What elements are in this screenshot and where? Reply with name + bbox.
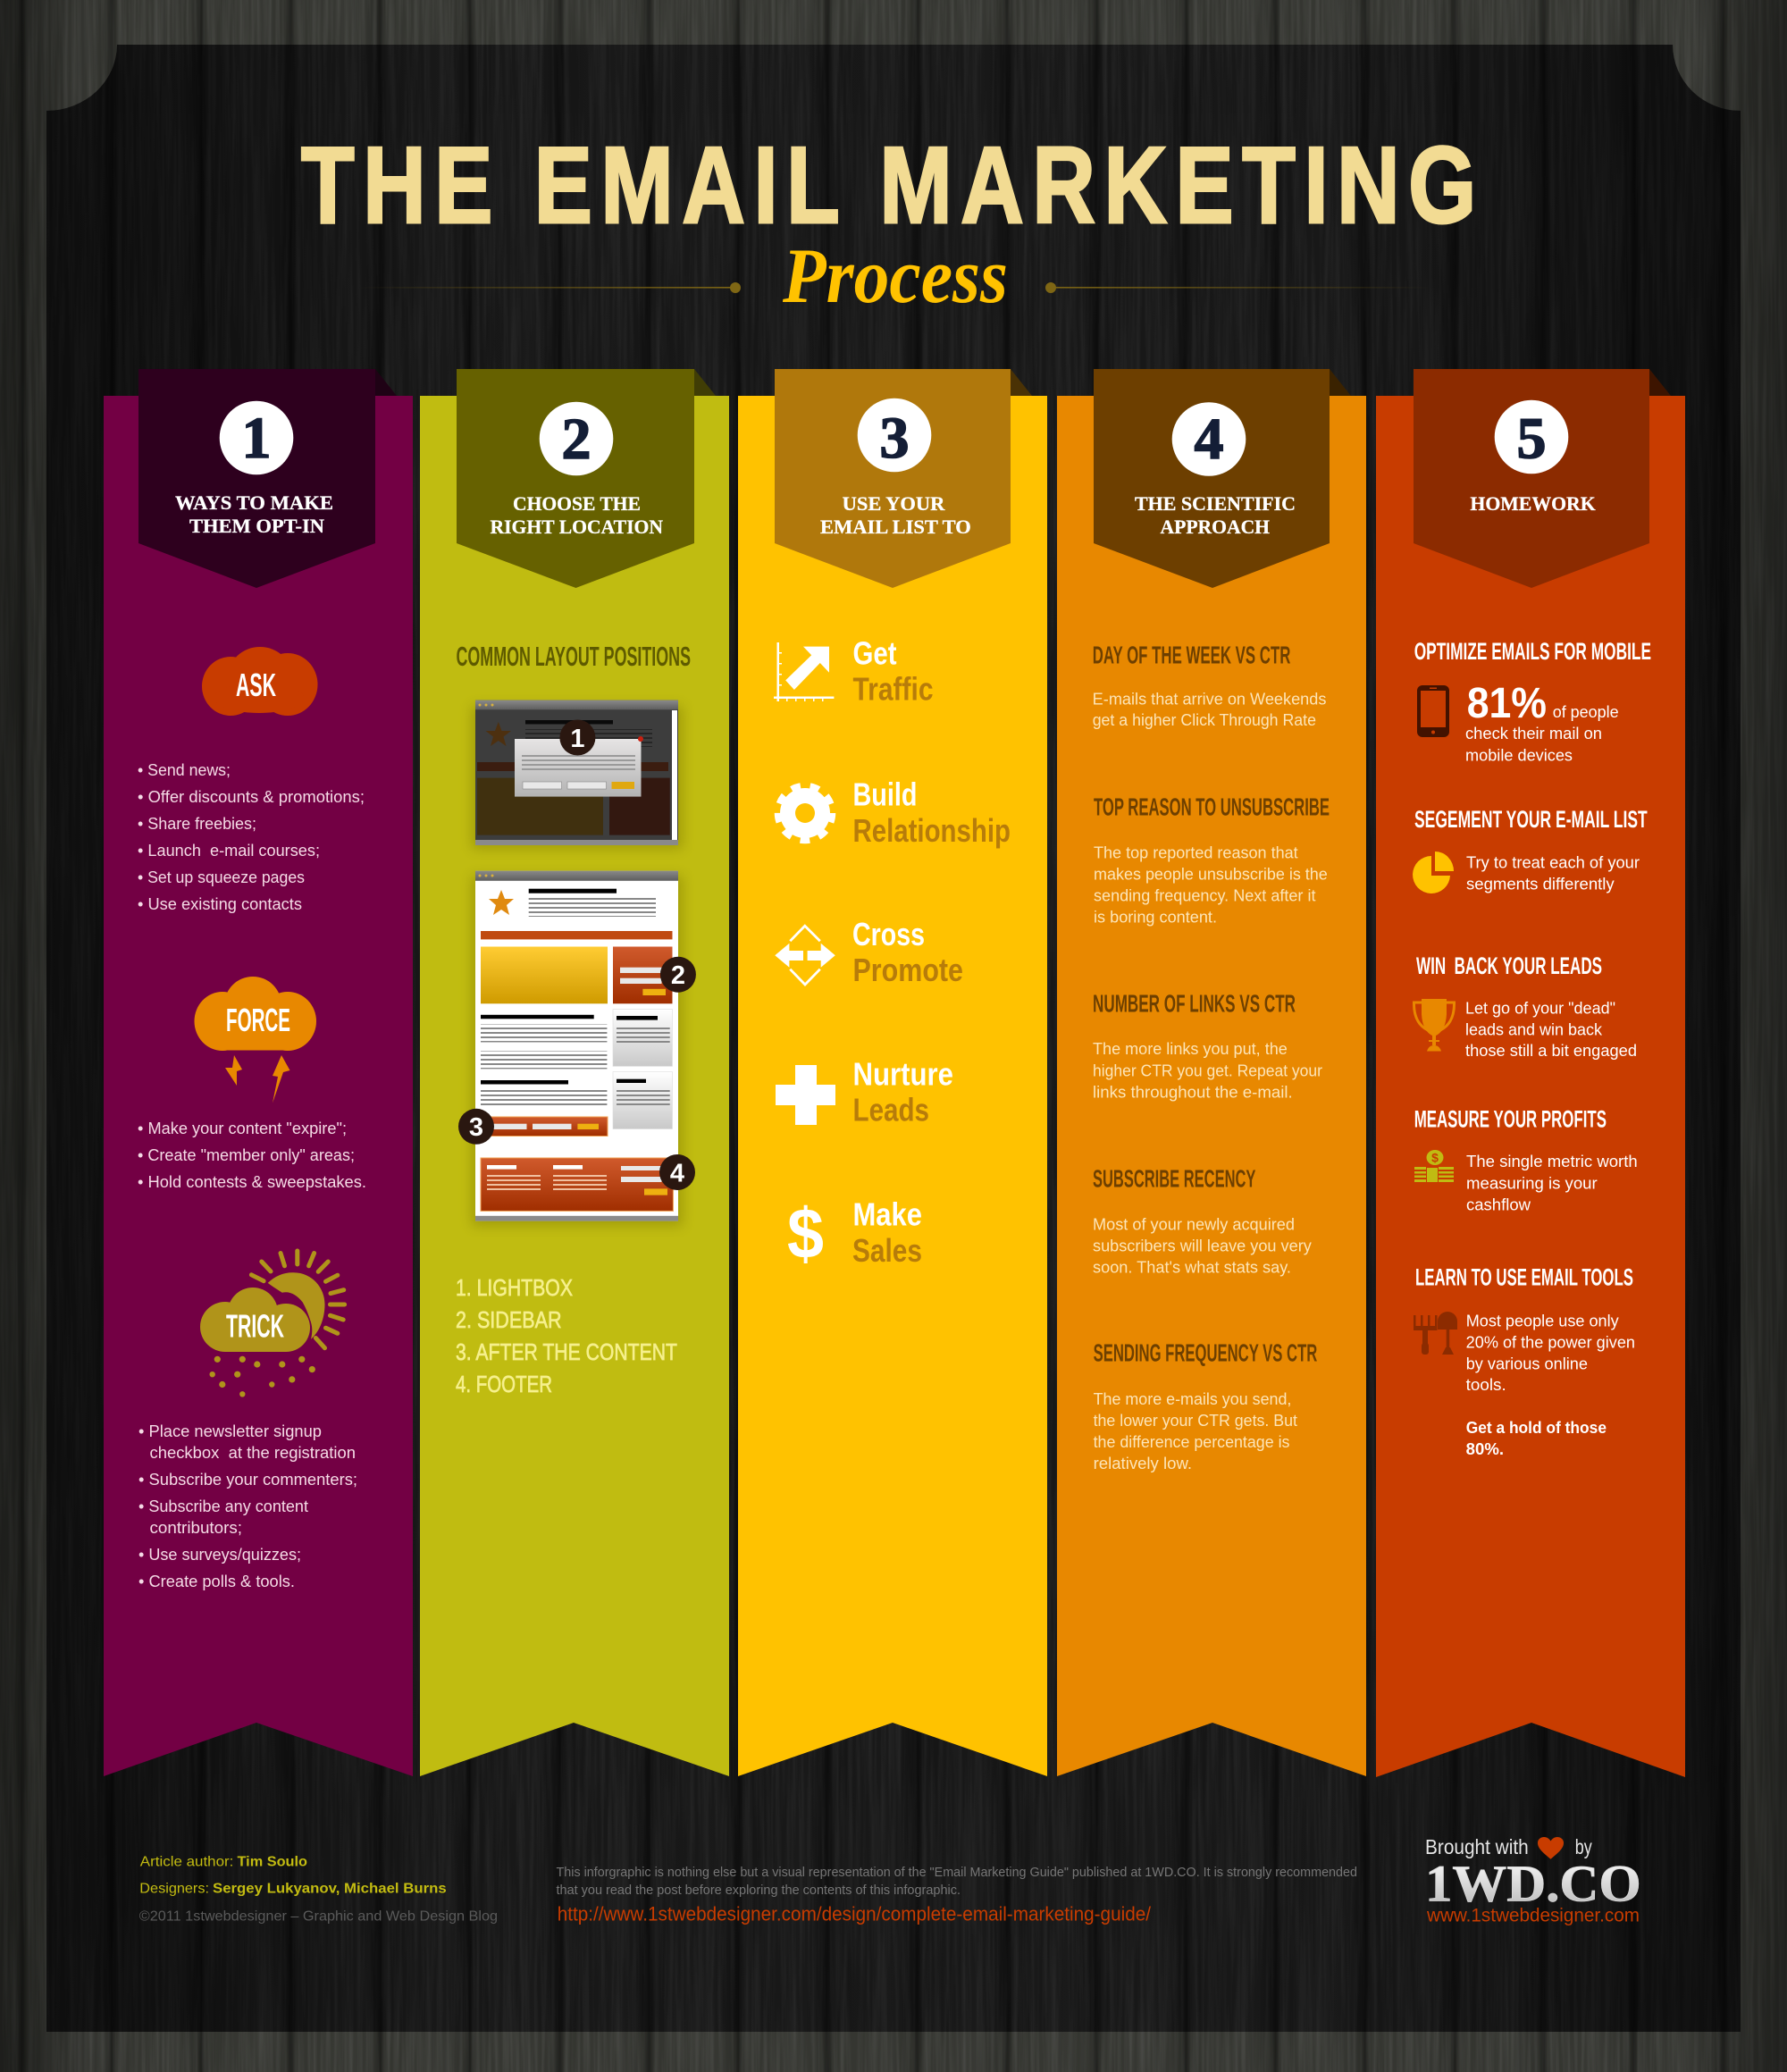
block: day of the week (1093, 642, 1326, 729)
block: segment your list: segments differently (1466, 876, 1615, 893)
block: top reason to unsubscribe: sending frequency. Next after it (1094, 887, 1315, 905)
footer credits: Designers: (139, 1881, 209, 1896)
block: top reason to unsubscribe: The top reported reason that (1094, 844, 1298, 862)
ask list: • Set up squeeze pages (138, 868, 305, 886)
block: measure your profits: The single metric worth (1466, 1153, 1638, 1170)
footer credits: Article author: (140, 1854, 233, 1869)
block: subscribe recency: soon. That's what stats say. (1093, 1258, 1291, 1276)
text: nurture leads: Nurture (852, 1056, 953, 1093)
block: win back leads: WIN BACK YOUR LEADS (1416, 952, 1602, 979)
block: segment your list: SEGEMENT YOUR E-MAIL LIST (1414, 806, 1648, 833)
ask list: • Share freebies; (138, 814, 256, 833)
icon: plus (776, 1065, 835, 1125)
layout positions list: 1. LIGHTBOX (456, 1274, 573, 1301)
icon: money: $ (1431, 1151, 1439, 1165)
footer credits: Sergey Lukyanov, Michael Burns (213, 1881, 447, 1896)
text: build relationship (852, 776, 1011, 849)
block: top reason to unsubscribe: makes people unsubscribe is the (1094, 865, 1328, 883)
title: THE EMAIL MARKETING (301, 125, 1476, 247)
footer credits: ©2011 1stwebdesigner – Graphic and Web Design Blog (139, 1908, 498, 1924)
block: subscribe recency: SUBSCRIBE RECENCY (1093, 1165, 1256, 1193)
header tab 2: CHOOSE THE (513, 492, 641, 515)
force list: • Create "member only" areas; (138, 1145, 355, 1164)
block: learn email tools (1414, 1263, 1635, 1458)
layout positions list (456, 1274, 677, 1397)
badge 1 (559, 720, 595, 756)
block: segment your list (1413, 806, 1648, 893)
ask list: • Send news; (138, 760, 231, 779)
force list (138, 1119, 366, 1191)
header tab 5: 5 (1517, 406, 1546, 472)
header tab 4: 4 (1194, 407, 1224, 472)
badge 2: 2 (671, 961, 685, 990)
header tab 3: USE YOUR (843, 492, 946, 515)
header tab 5 (1414, 369, 1671, 588)
header tab 4 (1094, 369, 1351, 588)
block: top reason to unsubscribe (1094, 793, 1330, 926)
text: cross promote (852, 916, 963, 988)
icon: fork and shovel (1414, 1312, 1457, 1355)
layout positions list: 3. AFTER THE CONTENT (456, 1338, 677, 1365)
block: measure your profits: cashflow (1466, 1195, 1531, 1213)
block: measure your profits: MEASURE YOUR PROFITS (1414, 1106, 1607, 1133)
trick list: • Use surveys/quizzes; (138, 1545, 301, 1564)
block: number of links (1093, 990, 1322, 1102)
force list: • Make your content "expire"; (138, 1119, 347, 1137)
badge 4 (659, 1154, 695, 1190)
text: get traffic (852, 634, 933, 708)
heading: common layout positions: COMMON LAYOUT POSITIONS (456, 641, 691, 672)
logo: brought with love by 1WD.CO: 1WD.CO (1425, 1854, 1641, 1912)
panel: ribbon 2 choose the right location (420, 369, 729, 1776)
footer note and link (556, 1866, 1357, 1925)
block: win back leads: those still a bit engaged (1465, 1042, 1637, 1060)
text: nurture leads: Leads (852, 1091, 929, 1128)
block: win back leads: leads and win back (1465, 1021, 1603, 1039)
icon: cross promote arrows (775, 926, 835, 985)
header tab 2: 2 (561, 407, 591, 472)
trick list: • Subscribe any content (138, 1497, 308, 1515)
trick list: contributors; (150, 1518, 242, 1537)
block: learn email tools: LEARN TO USE EMAIL TOOLS (1415, 1263, 1633, 1290)
icon: money (1414, 1150, 1454, 1182)
trick list: • Create polls & tools. (138, 1572, 295, 1590)
icon: ask cloud: ASK (236, 667, 276, 703)
block: number of links: higher CTR you get. Repeat your (1093, 1061, 1322, 1079)
icon: traffic arrow chart (774, 642, 834, 701)
badge 3 (458, 1109, 494, 1145)
ask list: • Launch e-mail courses; (138, 841, 320, 860)
block: learn email tools: Most people use only (1466, 1312, 1619, 1330)
text: build relationship: Relationship (852, 812, 1011, 849)
subtitle: Process: Process (782, 233, 1008, 320)
block: sending frequency (1094, 1339, 1317, 1472)
block: sending frequency: the difference percentage is (1094, 1433, 1290, 1451)
footer note and link: This inforgraphic is nothing else but a visual representation of the "Email Marketing Guide" published at 1WD.CO. It is strongly recommended (556, 1866, 1357, 1880)
block: measure your profits: measuring is your (1466, 1174, 1598, 1192)
ask list: • Offer discounts & promotions; (138, 787, 365, 806)
header tab 1: THEM OPT-IN (189, 515, 324, 537)
block: subscribe recency: Most of your newly acquired (1093, 1215, 1295, 1233)
text: make sales: Sales (852, 1232, 922, 1269)
block: subscribe recency (1093, 1165, 1312, 1276)
icon: trick sun and cloud (200, 1251, 345, 1397)
block: sending frequency: the lower your CTR gets. But (1094, 1412, 1297, 1430)
text: cross promote: Promote (852, 952, 963, 988)
ask list (138, 760, 365, 913)
header tab 1: 1 (241, 406, 272, 471)
block: day of the week: DAY OF THE WEEK VS CTR (1093, 642, 1290, 668)
text: get traffic: Traffic (852, 671, 933, 708)
icon: trick sun and cloud: TRICK (226, 1308, 284, 1344)
block: number of links: NUMBER OF LINKS VS CTR (1093, 990, 1296, 1018)
subtitle: Process (359, 233, 1430, 320)
force list: • Hold contests & sweepstakes. (138, 1172, 366, 1191)
logo: brought with love by 1WD.CO (1425, 1835, 1641, 1926)
block: learn email tools: Get a hold of those (1466, 1419, 1607, 1437)
block: learn email tools: 20% of the power given (1466, 1333, 1635, 1351)
text: nurture leads (852, 1056, 953, 1128)
trick list: checkbox at the registration (150, 1443, 356, 1462)
block: subscribe recency: subscribers will leave you very (1093, 1237, 1312, 1254)
icon: dollar: $ (787, 1194, 824, 1273)
block: number of links: links throughout the e-mail. (1093, 1084, 1293, 1102)
trick list (138, 1422, 357, 1590)
block: learn email tools: tools. (1466, 1376, 1506, 1394)
icon: force storm cloud (195, 977, 316, 1103)
logo: brought with love by 1WD.CO: Brought with (1425, 1835, 1529, 1858)
block: number of links: The more links you put, the (1093, 1040, 1288, 1058)
header tab 2 (457, 369, 716, 588)
header tab 2: RIGHT LOCATION (490, 516, 663, 538)
block: sending frequency: The more e-mails you send, (1094, 1390, 1291, 1408)
block: learn email tools: 80%. (1466, 1440, 1504, 1458)
badge 1: 1 (570, 725, 584, 753)
trick list: • Place newsletter signup (138, 1422, 322, 1440)
text: make sales: Make (852, 1196, 922, 1233)
block: optimize for mobile (1414, 638, 1651, 764)
icon: heart (1538, 1837, 1564, 1859)
block: sending frequency: SENDING FREQUENCY VS CTR (1094, 1339, 1317, 1367)
header tab 3 (775, 369, 1032, 588)
block: learn email tools: by various online (1466, 1355, 1588, 1372)
block: top reason to unsubscribe: TOP REASON TO UNSUBSCRIBE (1094, 793, 1330, 821)
logo: brought with love by 1WD.CO: by (1575, 1835, 1592, 1858)
layout positions list: 4. FOOTER (456, 1371, 552, 1397)
block: optimize for mobile: of people (1553, 703, 1619, 721)
logo: brought with love by 1WD.CO: www.1stwebdesigner.com (1426, 1905, 1640, 1926)
block: win back leads (1414, 952, 1637, 1060)
block: optimize for mobile: OPTIMIZE EMAILS FOR MOBILE (1414, 638, 1651, 665)
header tab 3: 3 (879, 406, 910, 471)
ask list: • Use existing contacts (138, 894, 302, 913)
text: build relationship: Build (852, 776, 917, 813)
footer credits (139, 1854, 498, 1924)
header tab 4: THE SCIENTIFIC (1135, 492, 1296, 515)
block: optimize for mobile: mobile devices (1465, 746, 1573, 764)
footer credits: Tim Soulo (238, 1854, 307, 1869)
panel: ribbon 4 the scientific approach (1057, 369, 1366, 1776)
footer note and link: http://www.1stwebdesigner.com/design/complete-email-marketing-guide/ (558, 1902, 1152, 1925)
header tab 3: EMAIL LIST TO (820, 516, 971, 538)
trick list: • Subscribe your commenters; (138, 1470, 357, 1489)
text: cross promote: Cross (852, 916, 925, 952)
block: segment your list: Try to treat each of your (1466, 854, 1640, 872)
panel: ribbon 3 use your email list to (738, 369, 1047, 1776)
header tab 4: APPROACH (1160, 516, 1270, 538)
header tab 1 (138, 369, 397, 588)
badge 2 (660, 957, 696, 993)
browser mockup: page layout (472, 871, 683, 1226)
icon: pie chart (1413, 851, 1454, 893)
block: top reason to unsubscribe: is boring content. (1094, 908, 1217, 926)
panel: ribbon 5 homework (1376, 369, 1685, 1777)
text: get traffic: Get (852, 634, 897, 672)
block: win back leads: Let go of your "dead" (1465, 999, 1615, 1017)
icon: ask cloud (202, 647, 318, 716)
block: optimize for mobile: check their mail on (1465, 725, 1602, 742)
icon: force storm cloud: FORCE (226, 1002, 290, 1038)
panel: ribbon 1 ways to make them opt-in (104, 369, 413, 1776)
icon: gear (777, 786, 833, 840)
header tab 5: HOMEWORK (1470, 492, 1596, 515)
icon: trophy (1414, 999, 1455, 1051)
layout positions list: 2. SIDEBAR (456, 1306, 561, 1333)
header tab 1: WAYS TO MAKE (175, 491, 333, 514)
block: sending frequency: relatively low. (1094, 1455, 1192, 1472)
text: make sales (852, 1196, 922, 1269)
block: day of the week: get a higher Click Through Rate (1093, 711, 1316, 729)
block: measure your profits (1414, 1106, 1638, 1213)
icon: phone (1417, 685, 1449, 737)
block: day of the week: E-mails that arrive on Weekends (1093, 691, 1326, 709)
block: optimize for mobile: 81% (1467, 680, 1547, 727)
footer note and link: that you read the post before exploring the contents of this infographic. (556, 1883, 961, 1898)
badge 3: 3 (469, 1113, 483, 1142)
badge 4: 4 (670, 1160, 684, 1188)
browser mockup: lightbox (472, 700, 683, 849)
